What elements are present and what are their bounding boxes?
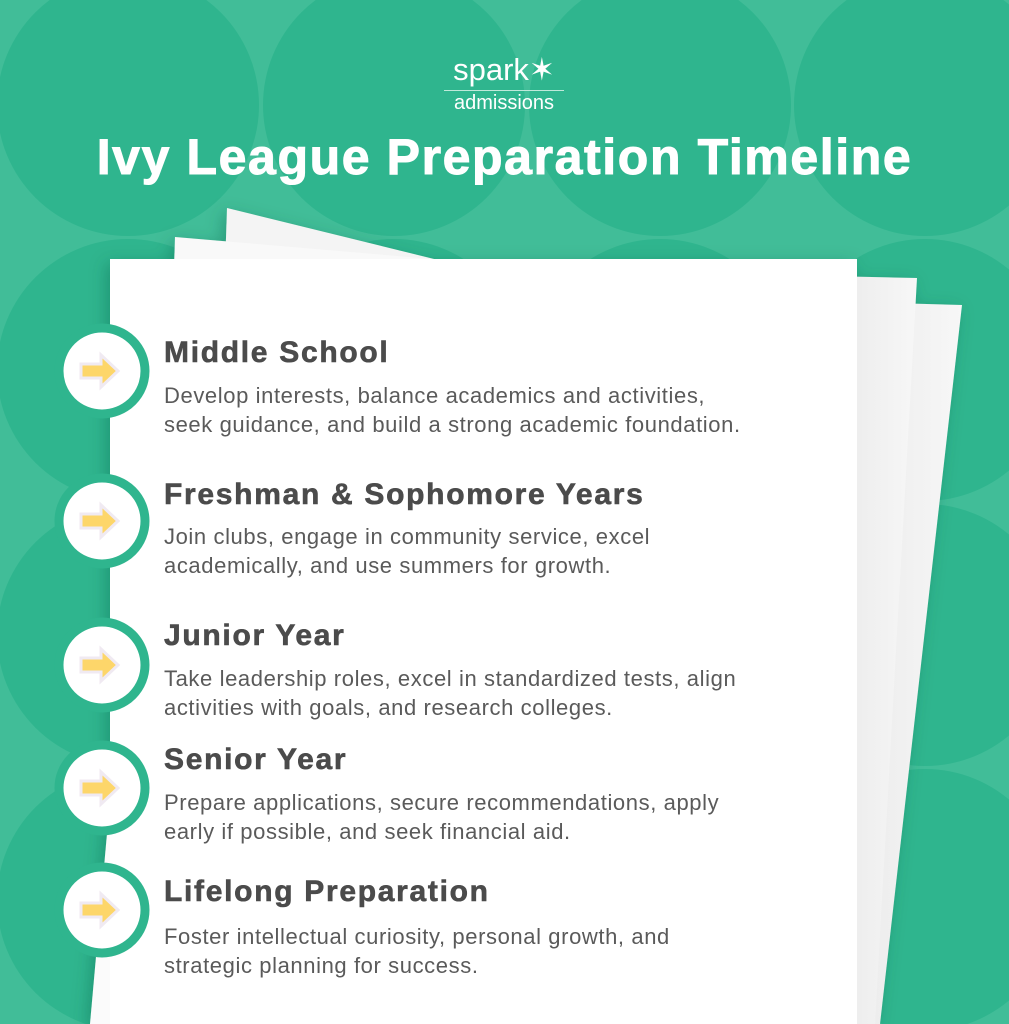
text: strategic planning for success.	[164, 953, 479, 978]
text: Prepare applications, secure recommendations, apply	[164, 790, 719, 815]
text: early if possible, and seek financial aid.	[164, 819, 571, 844]
icon: arrow circle 2	[59, 478, 145, 564]
title: Ivy League Preparation Timeline	[97, 129, 912, 185]
icon: arrow circle 4	[59, 745, 145, 831]
step 3	[164, 619, 736, 720]
timeline icons	[54, 324, 150, 958]
logo: admissions	[454, 92, 554, 114]
text: Foster intellectual curiosity, personal growth, and	[164, 924, 670, 949]
text: Lifelong Preparation	[164, 875, 490, 908]
icon: arrow circle 5	[59, 867, 145, 953]
text: Join clubs, engage in community service, excel	[164, 524, 650, 549]
text: academically, and use summers for growth.	[164, 553, 611, 578]
icon: arrow circle 1	[59, 328, 145, 414]
step 2	[164, 478, 650, 578]
back papers	[90, 208, 962, 1024]
text: Take leadership roles, excel in standardized tests, align	[164, 666, 736, 691]
step 5	[164, 875, 670, 978]
icon: arrow circle 3	[59, 622, 145, 708]
text: seek guidance, and build a strong academic foundation.	[164, 412, 741, 437]
text: Develop interests, balance academics and activities,	[164, 383, 705, 408]
text: activities with goals, and research colleges.	[164, 695, 613, 720]
logo: spark✶	[453, 52, 555, 87]
logo	[444, 52, 564, 114]
text: Middle School	[164, 336, 389, 369]
text: Senior Year	[164, 743, 347, 776]
text: Junior Year	[164, 619, 346, 652]
text: Freshman & Sophomore Years	[164, 478, 644, 511]
step 4	[164, 743, 719, 844]
step 1	[164, 336, 741, 437]
